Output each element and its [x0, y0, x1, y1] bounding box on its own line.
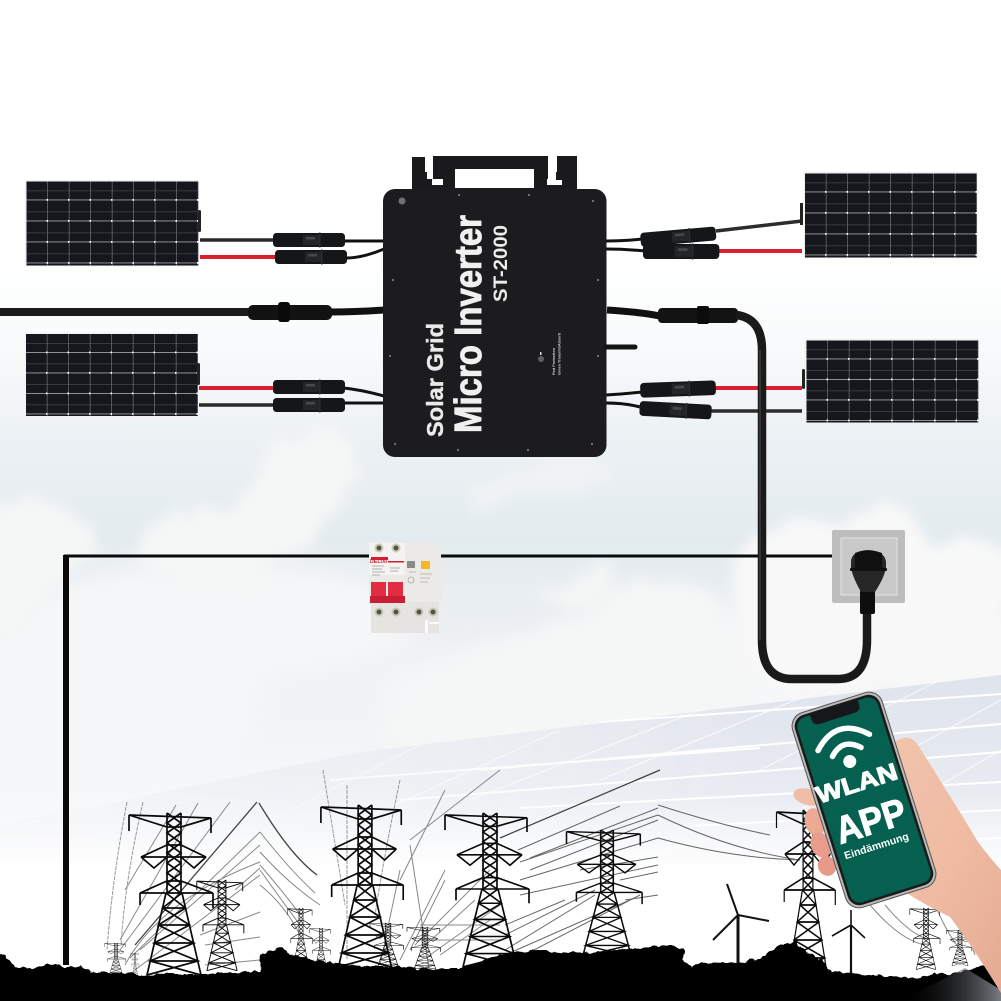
WLAN label: WLAN [813, 758, 901, 809]
wind turbines [713, 884, 865, 973]
hand holding phone [791, 738, 1001, 993]
panel: solar panel bottom right [802, 338, 978, 424]
left cables and connectors [199, 232, 384, 412]
circuit breaker: DELIXI [370, 559, 388, 565]
Eindämmung label: Eindämmung [843, 831, 910, 862]
indicator legend: Green Transmit/Absorb [558, 332, 562, 375]
product name: Micro Inverter: Micro Inverter [448, 215, 490, 433]
clouds [0, 432, 1001, 790]
product name: Solar Grid: Solar Grid [422, 323, 448, 437]
icon: wifi [814, 721, 877, 776]
bracket [412, 156, 577, 190]
panel: inverter body [383, 189, 606, 457]
phone [789, 689, 939, 911]
APP label: APP [830, 791, 912, 853]
ground silhouette [0, 942, 1001, 1001]
model number: ST-2000 [491, 225, 512, 302]
grid wire [64, 555, 834, 965]
panel: solar panel top right [804, 172, 978, 258]
main AC input cable [0, 302, 384, 322]
solar field background [405, 675, 1001, 818]
socket plate [832, 530, 905, 603]
circuit breaker [369, 543, 441, 633]
panel: solar panel top left [25, 180, 201, 266]
bottom-right ground fade [900, 968, 1001, 1001]
plug and output cable [607, 306, 887, 679]
panel: solar panel bottom left [25, 332, 200, 418]
pylons [105, 805, 972, 976]
power lines [107, 770, 975, 975]
inverter side stub [606, 344, 635, 350]
indicator legend: Red Protection [552, 347, 556, 375]
right cables and connectors [606, 203, 803, 420]
notch [810, 699, 861, 726]
